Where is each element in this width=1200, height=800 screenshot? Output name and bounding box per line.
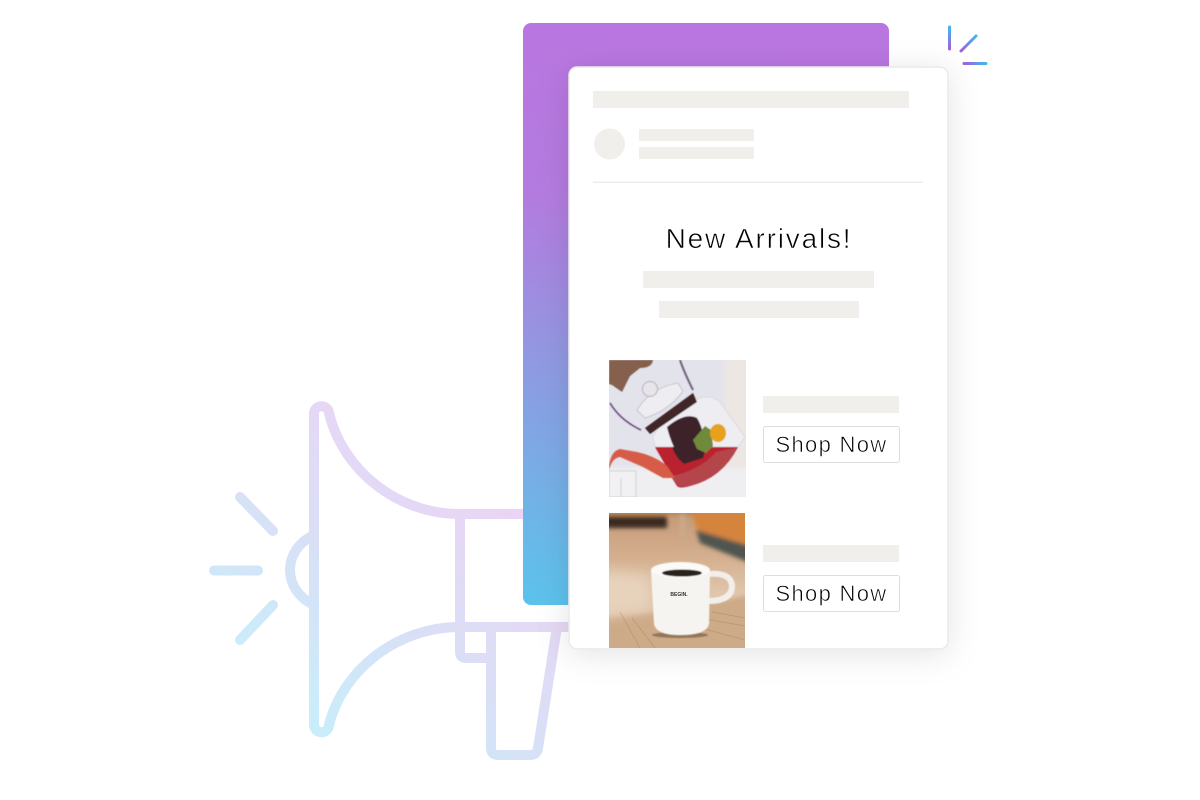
panel: email card [569,67,948,655]
hand [609,360,653,392]
sender name placeholder [639,129,754,141]
icon: sparkle lines [950,27,986,64]
button: Shop Now 2 [764,576,900,612]
glass dome [653,397,745,447]
button: Shop Now 2: Shop Now [776,581,887,606]
header divider [593,182,923,183]
panel: gradient backdrop [523,23,889,605]
email header placeholder bar [593,91,909,108]
lemon and leaves [693,426,713,453]
sender avatar placeholder [594,128,625,160]
button: Shop Now 1 [764,426,900,462]
body text placeholder 1 [643,271,874,288]
heading: New Arrivals: New Arrivals! [666,223,852,254]
tea liquid [655,447,738,488]
infuser [666,416,703,448]
body text placeholder 2 [659,301,859,318]
sender address placeholder [639,147,754,159]
photo: coffee mug on wooden table [609,513,745,648]
lid band [645,393,697,434]
product 2 title placeholder [763,545,899,562]
small glass [609,471,636,497]
product 1 title placeholder [763,396,899,413]
lid [637,383,683,418]
spout [609,449,675,478]
button: Shop Now 1: Shop Now [776,432,887,457]
handle [610,403,641,430]
mug label: BEGIN. [670,592,688,598]
photo: teapot pouring tea [609,360,746,497]
icon: megaphone [214,406,570,755]
